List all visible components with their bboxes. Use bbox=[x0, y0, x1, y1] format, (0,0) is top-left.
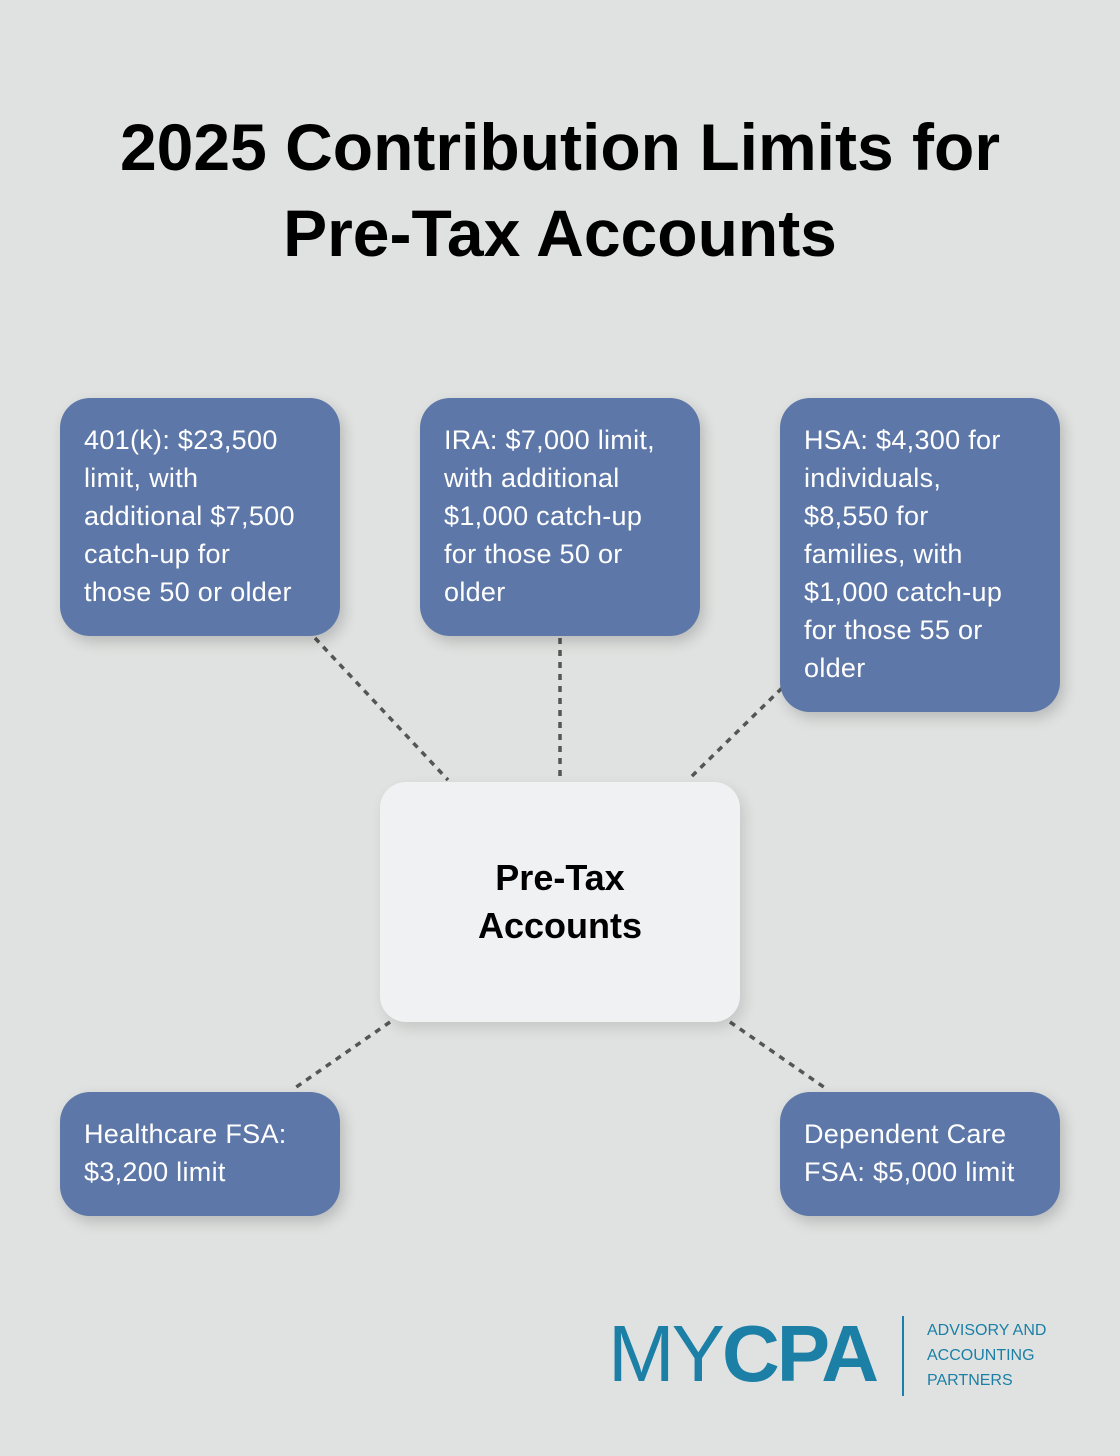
logo: MYCPA bbox=[608, 1309, 876, 1398]
box: IRA: IRA: $7,000 limit, bbox=[444, 425, 655, 455]
title: Pre-Tax Accounts bbox=[283, 196, 837, 270]
box: dependent care FSA: FSA: $5,000 limit bbox=[804, 1157, 1015, 1187]
title bbox=[120, 110, 1000, 270]
box: IRA bbox=[420, 398, 700, 636]
box: 401k: those 50 or older bbox=[84, 577, 292, 607]
box: healthcare FSA: Healthcare FSA: bbox=[84, 1119, 287, 1149]
box: HSA: HSA: $4,300 for bbox=[804, 425, 1001, 455]
box: HSA bbox=[780, 398, 1060, 712]
box: IRA: $1,000 catch-up bbox=[444, 501, 642, 531]
box: 401k: additional $7,500 bbox=[84, 501, 295, 531]
box: HSA: older bbox=[804, 653, 866, 683]
box: dependent care FSA: Dependent Care bbox=[804, 1119, 1006, 1149]
logo: PARTNERS bbox=[927, 1372, 1013, 1389]
box: dependent care FSA bbox=[780, 1092, 1060, 1216]
box: HSA: individuals, bbox=[804, 463, 941, 493]
box: IRA: for those 50 or bbox=[444, 539, 623, 569]
box: 401k bbox=[60, 398, 340, 636]
box: healthcare FSA bbox=[60, 1092, 340, 1216]
box: healthcare FSA: $3,200 limit bbox=[84, 1157, 226, 1187]
box: HSA: for those 55 or bbox=[804, 615, 983, 645]
logo: ADVISORY AND bbox=[927, 1322, 1046, 1339]
box: 401k: limit, with bbox=[84, 463, 198, 493]
box: HSA: $1,000 catch-up bbox=[804, 577, 1002, 607]
box: 401k: catch-up for bbox=[84, 539, 230, 569]
box: IRA: with additional bbox=[444, 463, 620, 493]
center node bbox=[380, 782, 740, 1022]
box: 401k: 401(k): $23,500 bbox=[84, 425, 278, 455]
box: HSA: $8,550 for bbox=[804, 501, 929, 531]
center node: Pre-Tax bbox=[495, 857, 625, 898]
logo: ACCOUNTING bbox=[927, 1347, 1035, 1364]
center node: Accounts bbox=[478, 905, 642, 946]
title: 2025 Contribution Limits for bbox=[120, 110, 1000, 184]
box: IRA: older bbox=[444, 577, 506, 607]
box: HSA: families, with bbox=[804, 539, 963, 569]
logo bbox=[608, 1309, 1046, 1398]
